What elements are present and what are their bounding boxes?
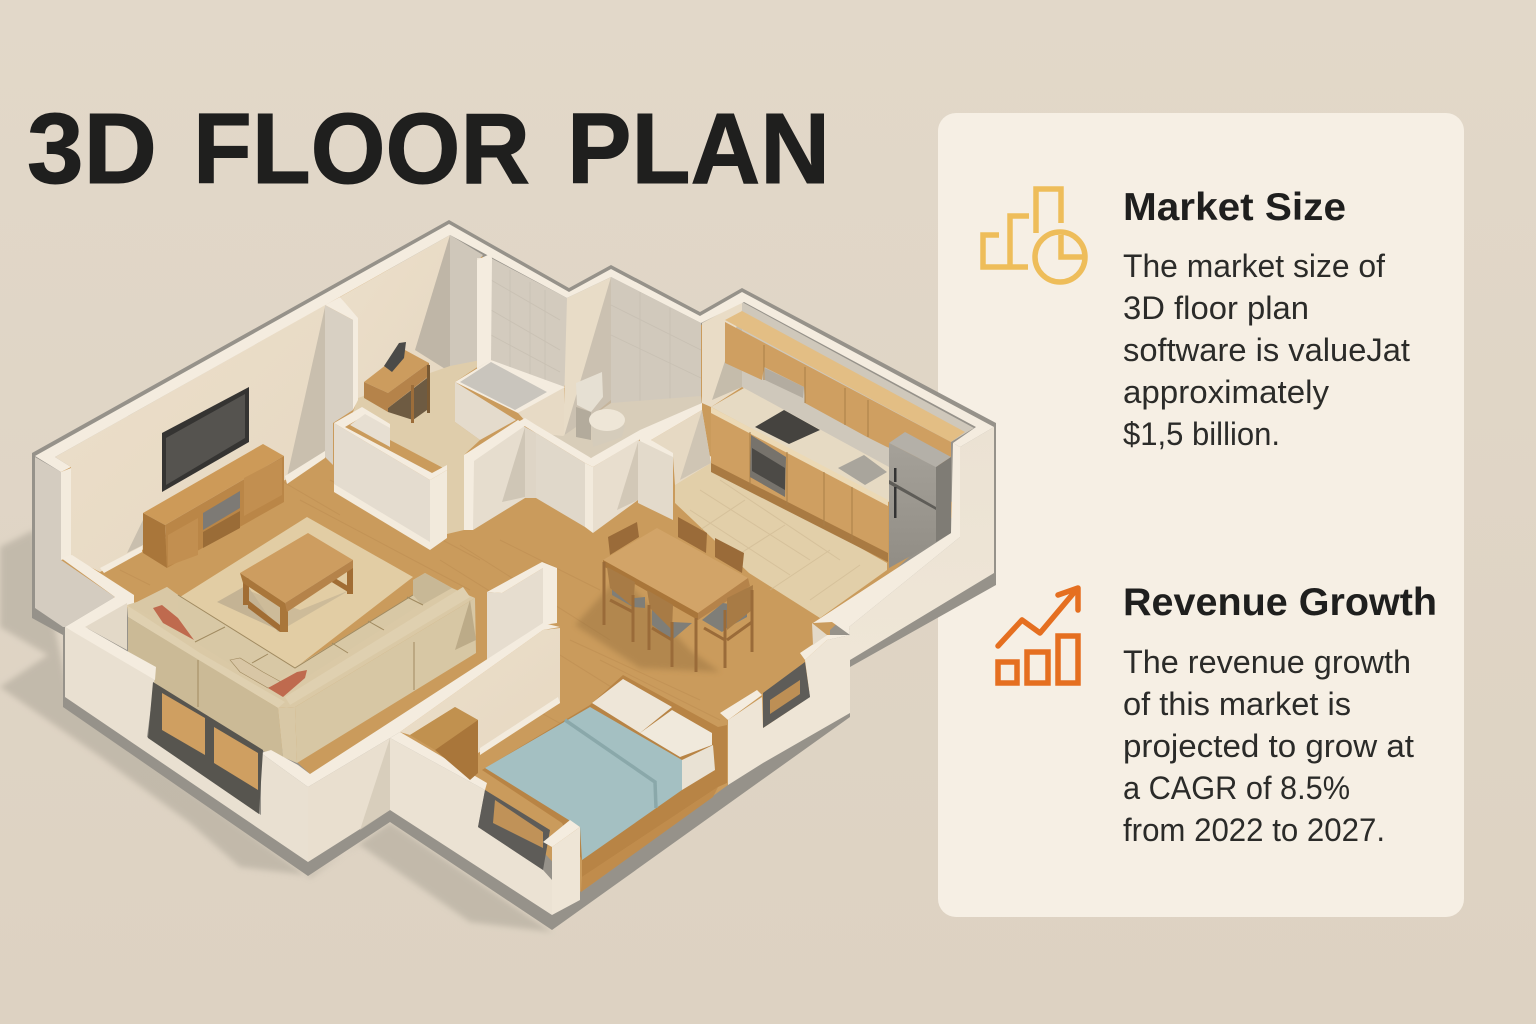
panel: market stats (938, 113, 1464, 917)
kitchen back wall (742, 302, 974, 533)
sofa top surfaces (127, 573, 475, 708)
kitchen counter and base cabinets (711, 388, 889, 562)
closet front partition (334, 407, 447, 550)
title: PLAN (567, 93, 830, 205)
bedroom outer wall (390, 732, 552, 915)
floor grain (120, 480, 720, 740)
text block: market size: approximately (1123, 374, 1329, 410)
bathroom tile wall (491, 258, 567, 390)
text block: revenue growth: from 2022 to 2027. (1123, 812, 1385, 848)
long bedroom wall (261, 623, 560, 787)
nightstand (410, 707, 478, 780)
blanket (485, 707, 682, 860)
title: FLOOR (193, 93, 530, 205)
closet back walls (325, 305, 353, 465)
TV (162, 387, 249, 492)
icon: growth arrow and bars (998, 588, 1078, 683)
pillows (592, 679, 672, 733)
kitchen tile floor (675, 463, 887, 618)
text block: market size: $1,5 billion. (1123, 416, 1280, 452)
heading: market size: Market Size (1123, 186, 1346, 229)
front dining chairs (604, 562, 753, 672)
text block: revenue growth: The revenue growth (1123, 644, 1411, 680)
sofa front faces (128, 617, 283, 757)
side window (763, 662, 810, 728)
heading: revenue growth: Revenue Growth (1123, 581, 1437, 624)
TV console (143, 444, 284, 568)
bedroom corner pillar (543, 820, 580, 915)
right front wall with window (720, 623, 850, 785)
rug (180, 517, 413, 668)
desk with mirror (364, 342, 430, 423)
dining shadow (575, 575, 720, 672)
bedroom window (478, 790, 550, 870)
text block: revenue growth (1123, 644, 1414, 848)
ground shadow (0, 530, 552, 932)
bath side wall (518, 386, 564, 440)
front wall with window (65, 627, 390, 862)
bed (482, 675, 727, 892)
text block: market size: The market size of (1123, 248, 1385, 284)
dining table (603, 528, 750, 620)
text block: market size (1123, 248, 1410, 452)
floor plan illustration (0, 220, 996, 932)
oven (750, 435, 786, 497)
icon: bar chart with pie (983, 189, 1085, 282)
top of rear outer walls (35, 224, 994, 472)
stub wall beside hall (487, 562, 557, 660)
kitchen upper cabinets (725, 311, 965, 470)
sectional sofa (127, 573, 476, 763)
text block: market size: software is valueJat (1123, 332, 1410, 368)
text block: revenue growth: of this market is (1123, 686, 1351, 722)
refrigerator (889, 432, 951, 568)
closet tile floor (353, 358, 491, 534)
sink (838, 455, 887, 485)
coffee table (217, 533, 353, 632)
toilet alcove walls (563, 277, 611, 440)
building silhouette and plinth (32, 220, 996, 930)
text block: revenue growth: projected to grow at (1123, 728, 1414, 764)
cushions (153, 605, 194, 640)
rear dining chairs (608, 517, 744, 573)
bathtub partition (455, 360, 565, 440)
baseboard kitchen stub (675, 456, 711, 485)
range hood (765, 368, 804, 398)
title (27, 93, 830, 205)
cooktop (755, 410, 820, 444)
back wall: living room (55, 305, 325, 572)
text block: revenue growth: a CAGR of 8.5% (1123, 770, 1350, 806)
front window (148, 682, 263, 814)
left wall stub face (35, 457, 115, 627)
text block: market size: 3D floor plan (1123, 290, 1309, 326)
title: 3D (27, 93, 157, 205)
kitchen end wall (702, 302, 742, 407)
partition walls near bathroom (464, 403, 711, 533)
toilet alcove floor (536, 396, 702, 458)
toilet (576, 372, 625, 447)
right outer wall (849, 427, 994, 660)
wood floor (60, 240, 960, 892)
